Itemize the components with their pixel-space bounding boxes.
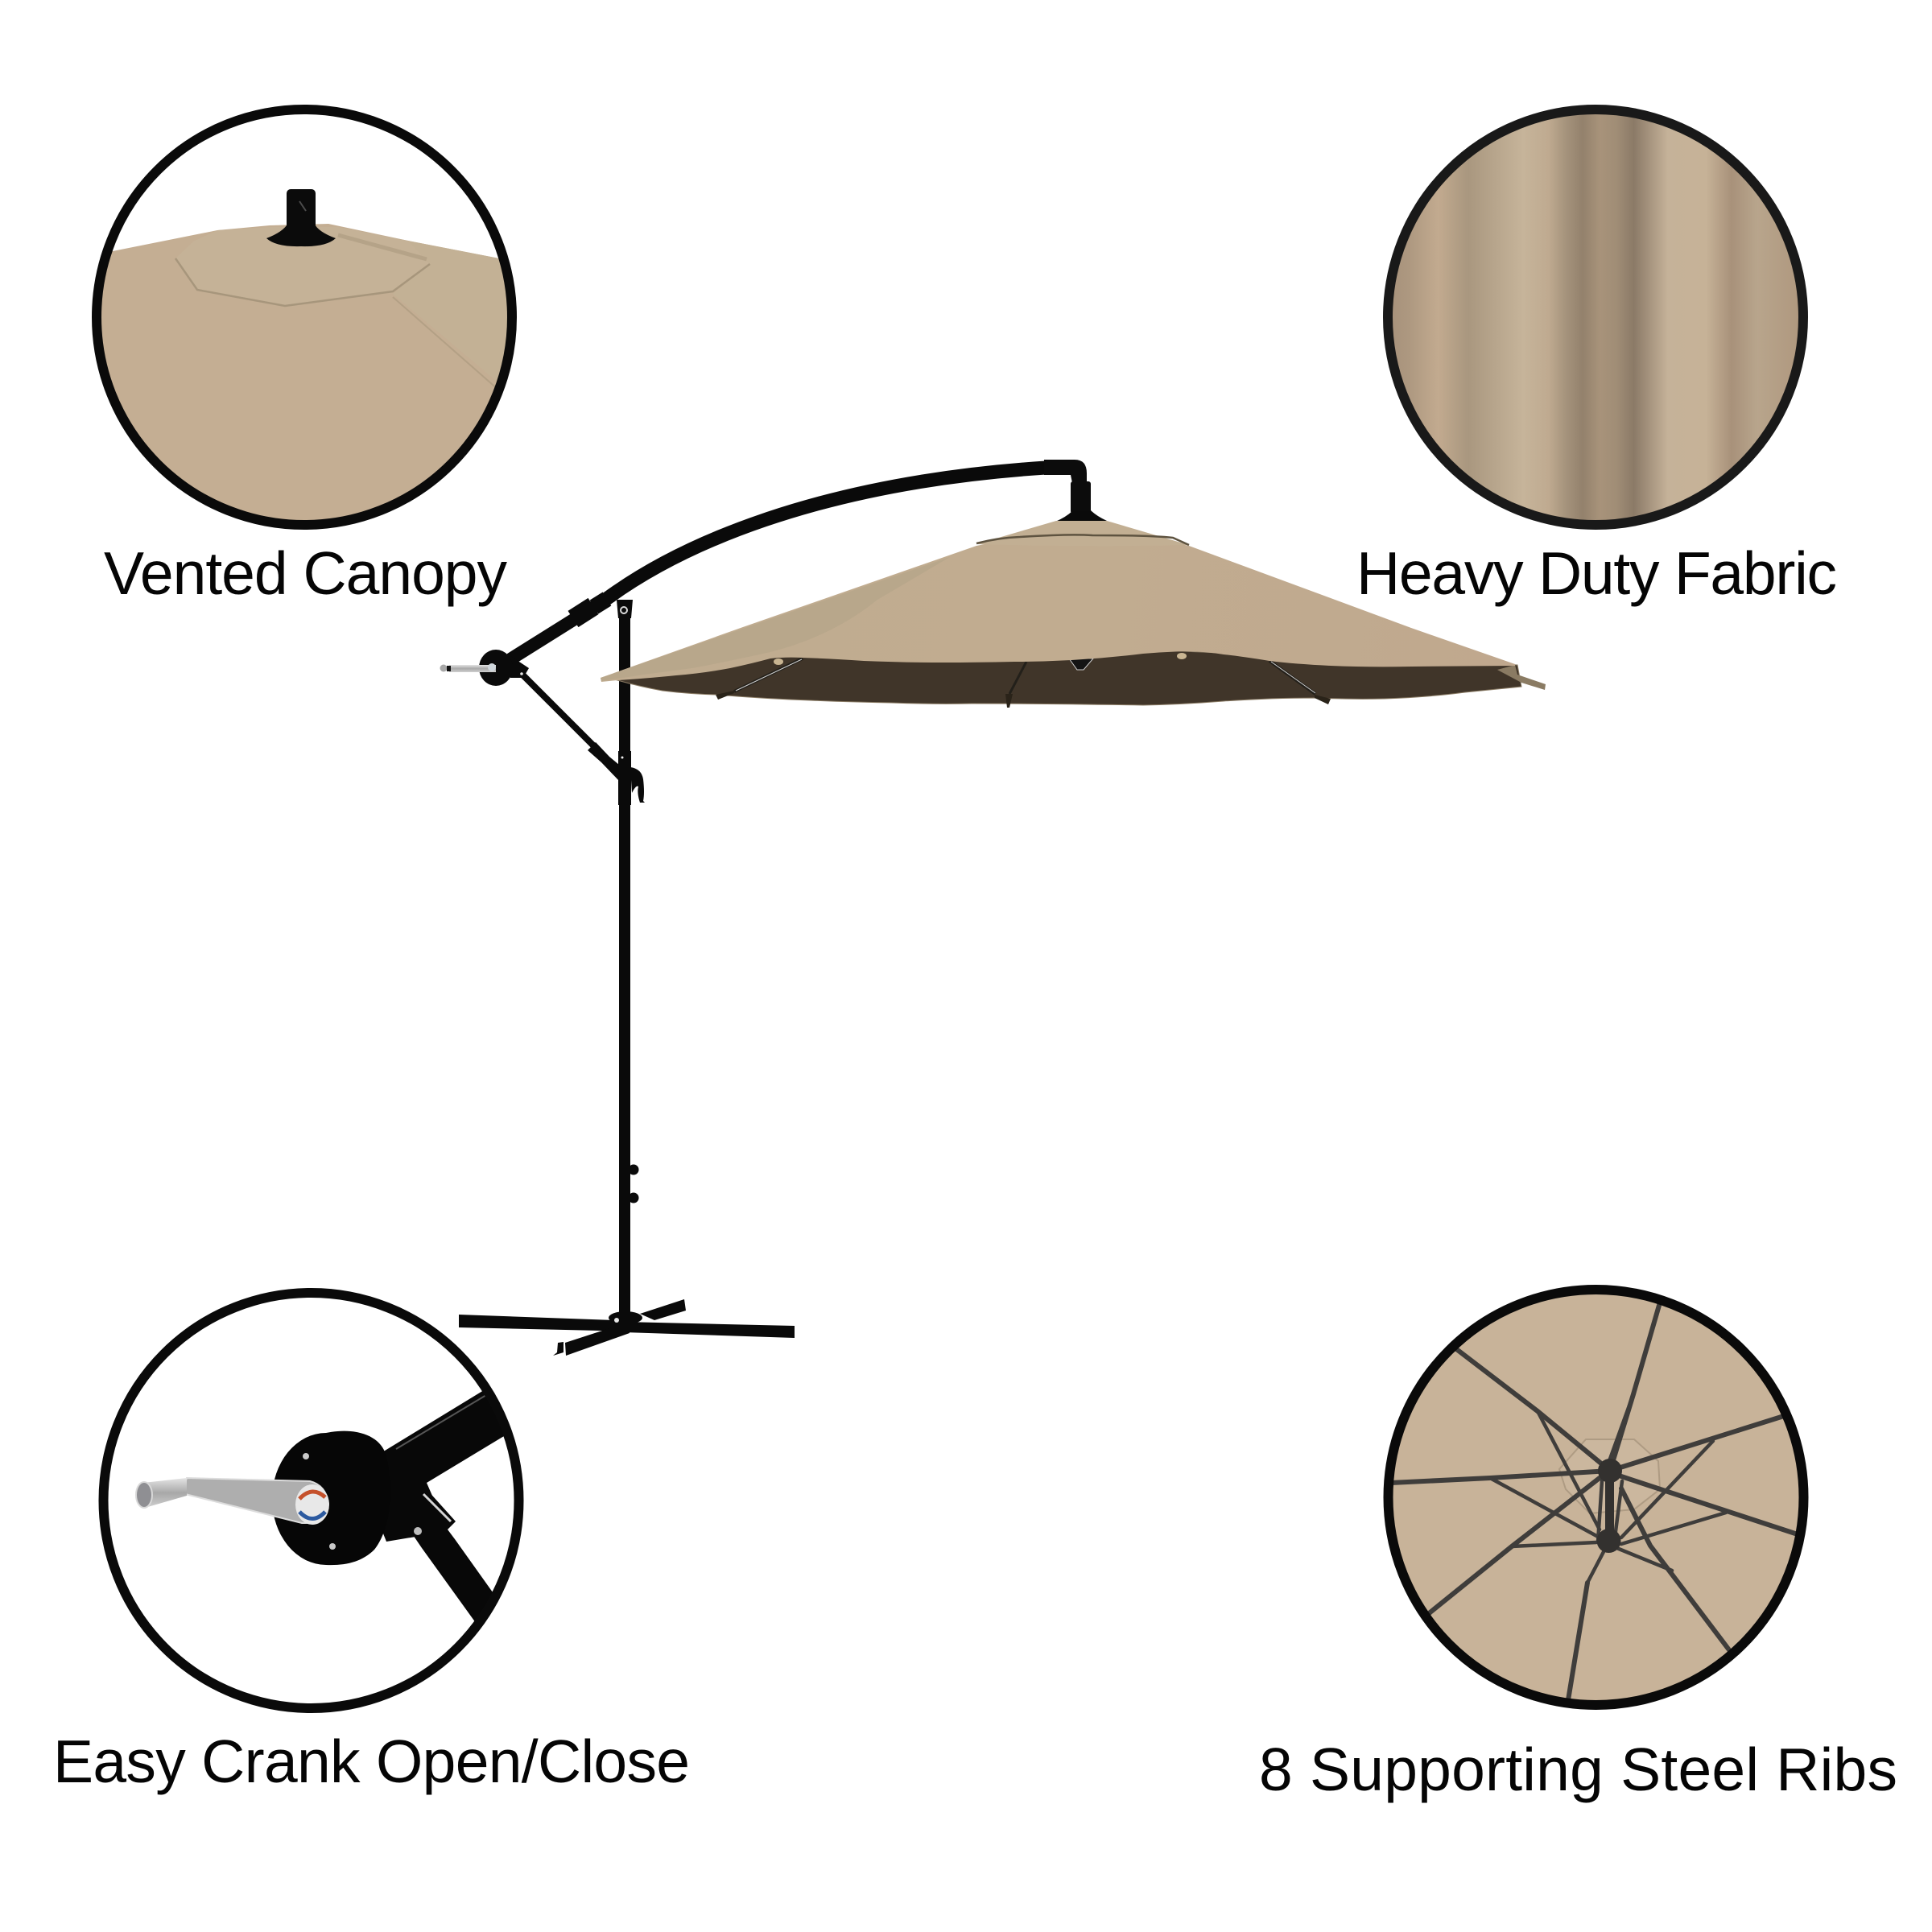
crank handle: [440, 663, 496, 672]
panel: vented canopy: [80, 109, 531, 607]
curved arm: [510, 468, 1046, 659]
canopy vent tier: [976, 521, 1189, 546]
caption: Easy Crank Open/Close: [53, 1728, 690, 1795]
circle ring: [1388, 109, 1803, 525]
ribs and struts: [1391, 1302, 1798, 1700]
inner vent: [1559, 1439, 1660, 1513]
caption: 8 Supporting Steel Ribs: [1259, 1736, 1897, 1803]
caption: Vented Canopy: [104, 539, 507, 607]
circle ring: [103, 1293, 518, 1708]
arm elbow: [1044, 460, 1087, 483]
fabric underside: [1388, 1290, 1803, 1705]
canopy underside: [617, 636, 1546, 708]
umbrella product illustration: [440, 460, 1546, 1356]
cross base: [459, 1299, 795, 1356]
circle ring: [97, 109, 512, 525]
circle ring: [1388, 1290, 1803, 1705]
central hub: [1597, 1459, 1622, 1553]
panel: easy crank: [53, 1293, 690, 1795]
vented canopy detail image: [101, 224, 507, 520]
fabric folds image: [1388, 109, 1803, 525]
panel: steel ribs: [1259, 1290, 1897, 1803]
canopy fabric knobs: [774, 653, 1187, 665]
crank disk: [479, 650, 513, 686]
canopy top fabric: [601, 535, 1515, 682]
crank handle: [136, 1478, 329, 1525]
canopy left panel fold: [601, 557, 950, 681]
diagonal strut: [507, 654, 645, 803]
caption: Heavy Duty Fabric: [1356, 539, 1837, 607]
canopy finial cone: [1055, 510, 1107, 522]
panel: heavy duty fabric: [1356, 109, 1837, 607]
vertical hub: [1071, 481, 1091, 514]
crank detail image: [383, 1391, 504, 1621]
main pole: [617, 600, 639, 1316]
finial: [266, 189, 336, 246]
crank housing: [272, 1431, 422, 1565]
